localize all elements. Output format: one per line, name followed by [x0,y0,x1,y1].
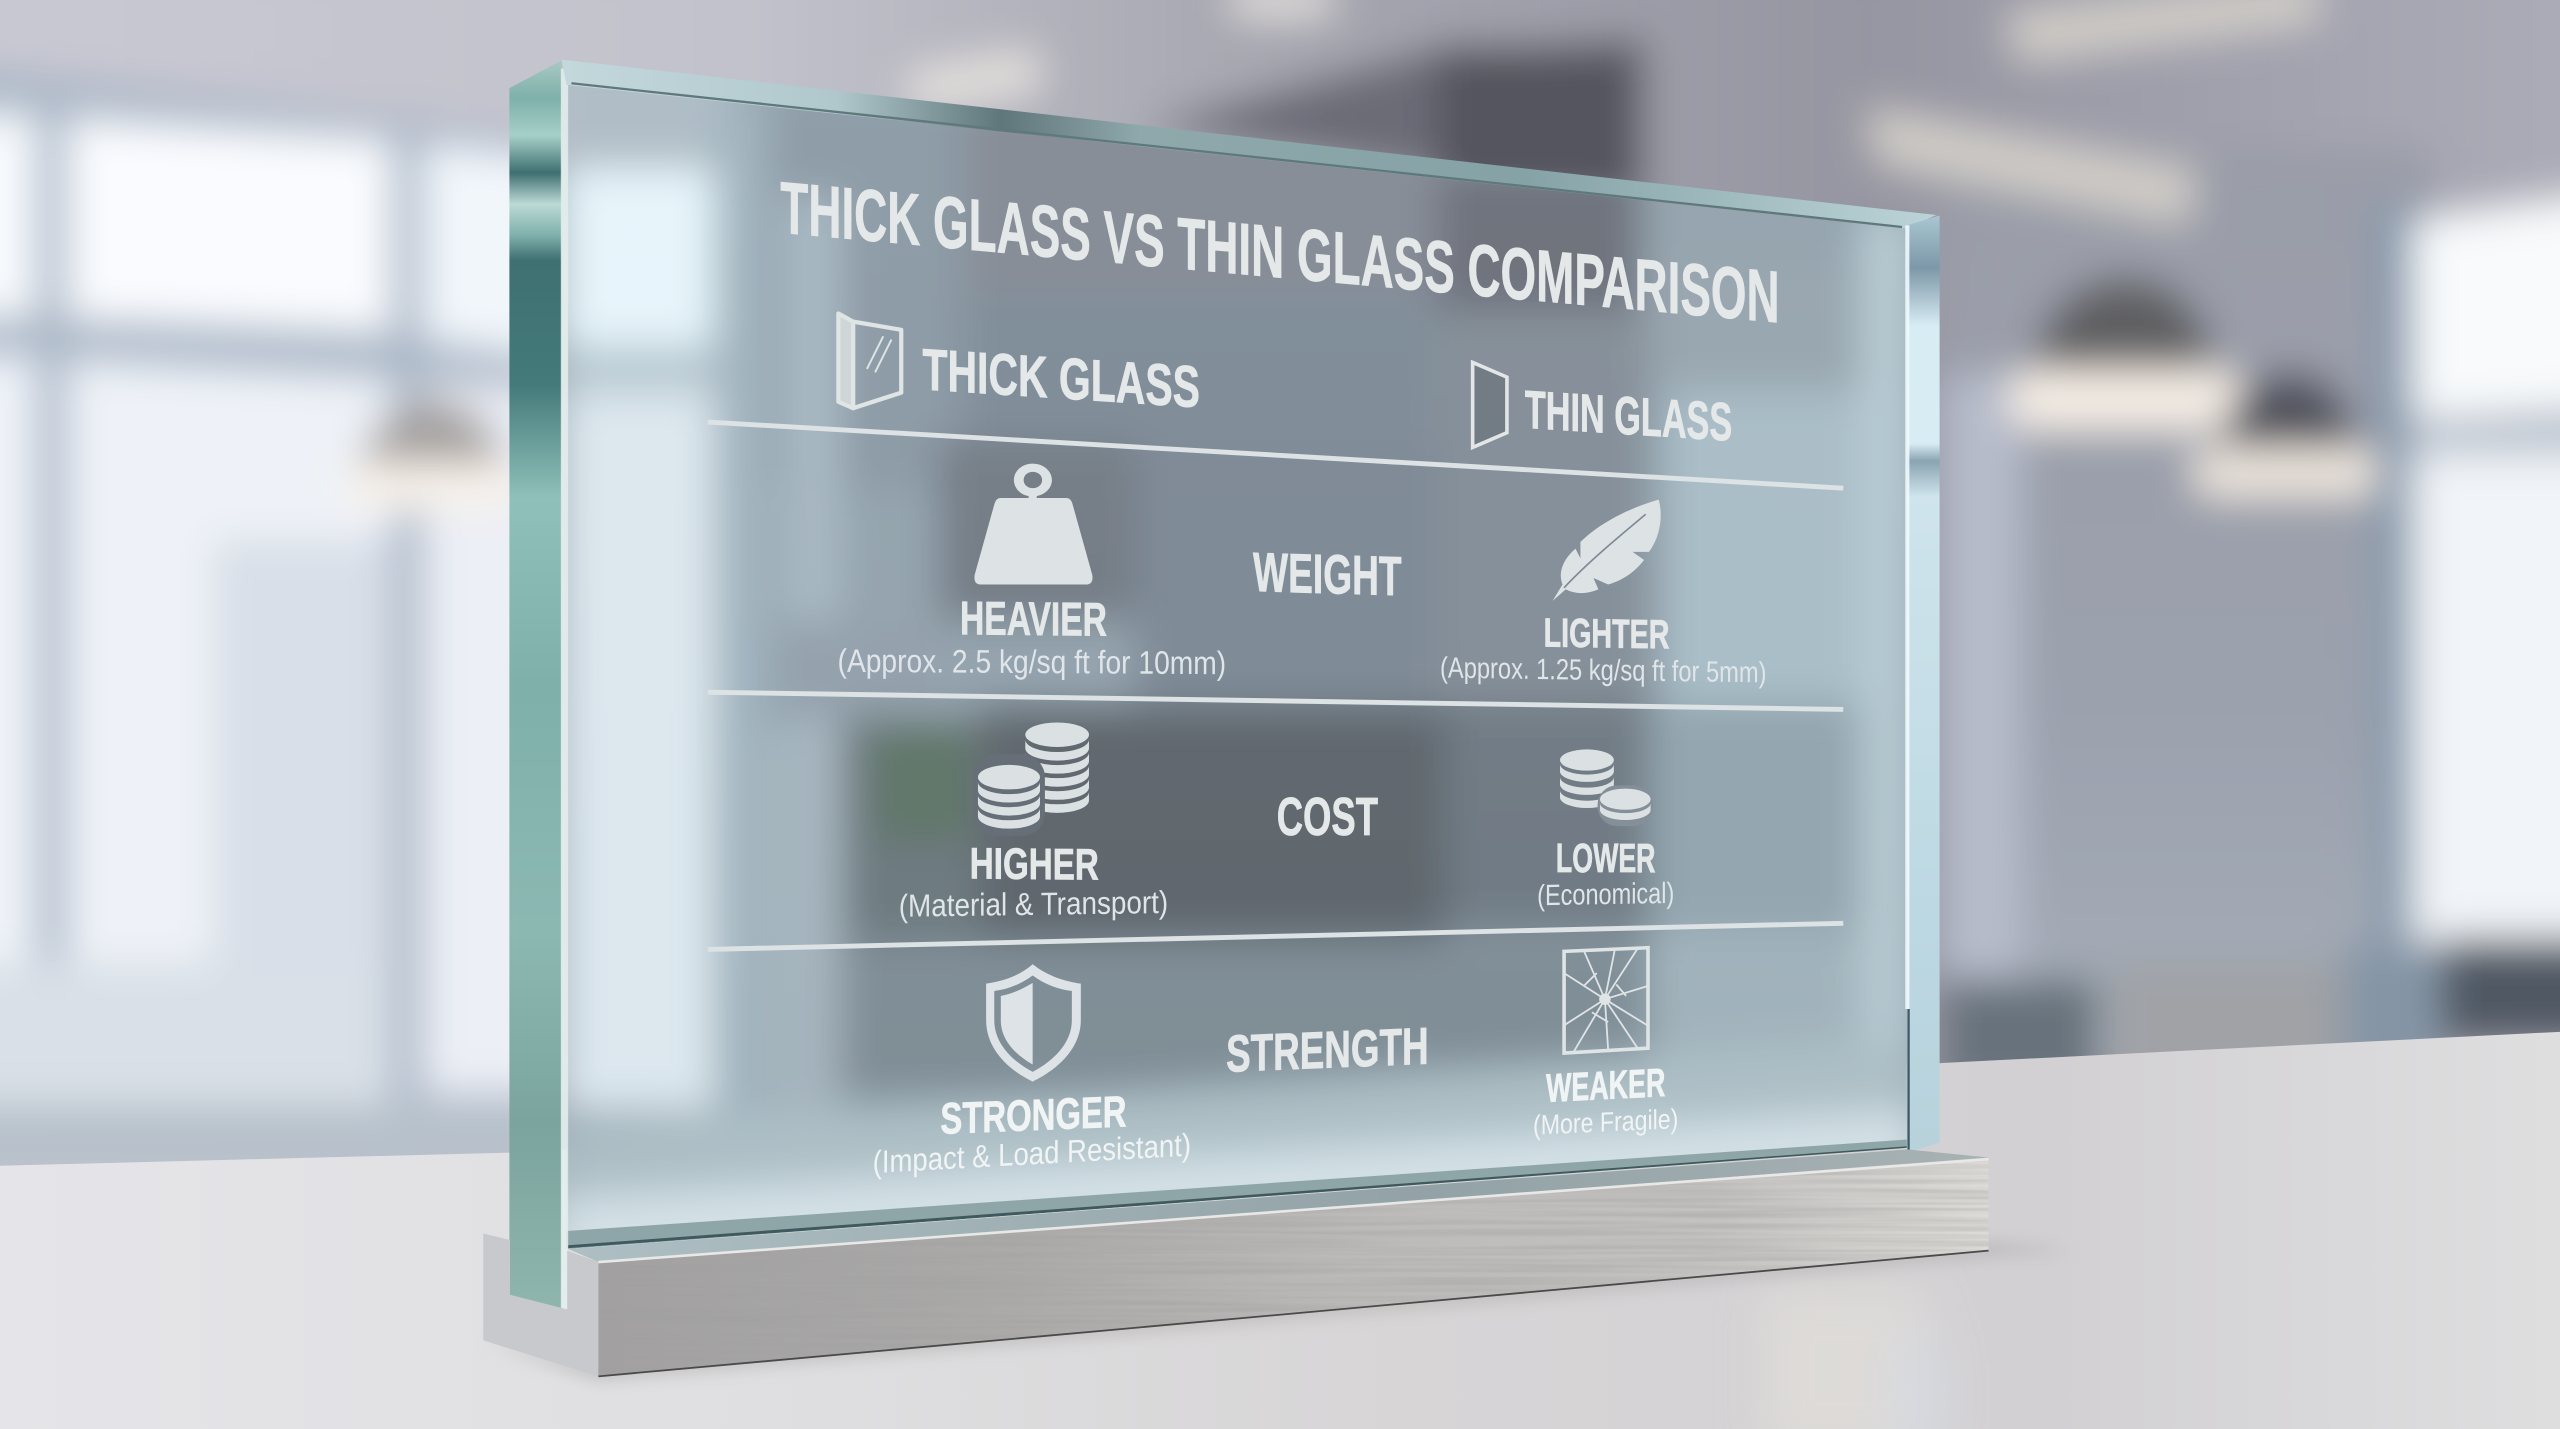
heading: thick glass: THICK GLASS [922,337,1200,420]
base bottom edge [598,1251,1989,1376]
panel: glass sign [509,49,1943,1309]
background: ceiling lights [903,0,2318,225]
icon: thin glass pane [1473,362,1507,447]
label: lighter: LIGHTER [1544,610,1669,657]
icon: thick glass pane [838,313,901,408]
label: stronger: STRONGER [940,1087,1127,1144]
base left channel [483,1233,598,1376]
base front face [598,1159,1989,1376]
glass lower inner edge [567,1140,1907,1249]
note: thin cost: (Economical) [1537,877,1674,912]
icon: feather [1553,500,1661,601]
background: right wall [1943,147,2433,1078]
icon: tall coin stacks [973,722,1089,836]
label: heavier: HEAVIER [960,592,1107,647]
table reflections below sign [1763,1290,1943,1429]
background: left window [0,65,555,1176]
glass left edge [509,60,562,1309]
note: thick cost: (Material & Transport) [899,884,1168,924]
row: strength [873,948,1678,1180]
column header: thin glass [1473,362,1732,453]
glass top inner line [571,83,1902,227]
row label: weight: WEIGHT [1253,541,1402,607]
glass right highlight [1905,225,1909,1009]
base contact shadow [483,1241,2073,1381]
metal base [483,1149,1998,1380]
title: THICK GLASS VS THIN GLASS COMPARISON [780,166,1780,339]
note: thick strength: (Impact & Load Resistant) [873,1127,1191,1180]
background: pale column beside glass [1943,376,2021,980]
icon: shield [986,964,1081,1082]
background: right lamps [2008,278,2397,496]
row: cost [899,722,1674,924]
background: dark interior column behind the sign [1143,39,1646,209]
note: thick weight: (Approx. 2.5 kg/sq ft for 10mm) [838,642,1226,681]
glass face with frosted office behind it [566,85,1907,1249]
icon: heavy weight [974,464,1093,584]
icon: short coin stacks [1560,749,1653,826]
base top face [568,1149,1989,1262]
background: far furniture [1943,939,2560,1094]
brushed finish [1178,1164,1988,1311]
icon: shattered glass [1564,948,1648,1053]
base top highlight [598,1159,1989,1262]
row label: cost: COST [1277,787,1378,847]
note: thin strength: (More Fragile) [1533,1103,1678,1141]
background: left lamp [343,400,522,509]
label: higher: HIGHER [970,839,1099,890]
row: weight [838,464,1767,689]
row label: strength: STRENGTH [1226,1018,1429,1084]
note: thin weight: (Approx. 1.25 kg/sq ft for 5mm) [1440,652,1767,689]
glass left highlight [561,69,568,1309]
heading: thin glass: THIN GLASS [1525,380,1732,453]
glass top edge [562,60,1936,229]
label: lower: LOWER [1556,835,1656,881]
glass right dark line [1908,1009,1910,1153]
row dividers [708,422,1843,949]
column header: thick glass [838,313,1200,420]
table surface [0,1032,2560,1429]
glass right edge [1907,216,1940,1153]
background: right window [2376,193,2560,1069]
label: weaker: WEAKER [1546,1061,1665,1111]
